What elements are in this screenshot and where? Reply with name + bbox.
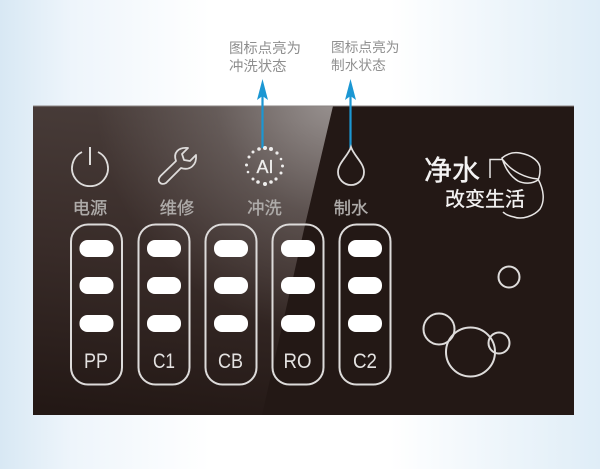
icon: power: [72, 147, 108, 186]
icon: water drop: [338, 147, 364, 185]
annotation: water production state: [331, 39, 399, 73]
labels: function names: 冲洗: [247, 198, 282, 218]
capsule: PP: PP: [84, 350, 108, 373]
capsule: CB: [206, 224, 256, 384]
capsule: C2: C2: [353, 350, 377, 373]
logo: slogan with leaf: 改变生活: [445, 188, 525, 211]
logo: slogan with leaf: [424, 153, 543, 218]
icon: AI flush: AI: [256, 157, 274, 177]
capsule: C1: C1: [153, 350, 175, 373]
annotation: water production state: 图标点亮为: [331, 39, 399, 55]
bubbles: [424, 266, 520, 376]
labels: function names: 制水: [334, 198, 368, 218]
annotation: flush state: 冲洗状态: [229, 58, 287, 75]
icon: AI flush: [245, 146, 284, 186]
labels: function names: 电源: [73, 198, 107, 218]
icon: wrench: [159, 148, 196, 184]
arrow: water: [345, 79, 356, 148]
capsule: RO: [272, 224, 324, 384]
annotation: flush state: 图标点亮为: [229, 40, 301, 57]
annotation: water production state: 制水状态: [331, 58, 386, 73]
capsule: CB: CB: [218, 350, 243, 373]
capsule: PP: [71, 224, 122, 384]
annotation: flush state: [229, 40, 301, 75]
capsule: C1: [138, 224, 190, 384]
capsule: RO: RO: [284, 350, 312, 373]
labels: function names: 维修: [160, 198, 194, 218]
logo: slogan with leaf: 净水: [424, 155, 480, 186]
panel: dark glass: [33, 106, 574, 415]
arrow: flush: [257, 79, 268, 148]
capsule: C2: [340, 224, 390, 384]
labels: function names: [73, 198, 368, 218]
